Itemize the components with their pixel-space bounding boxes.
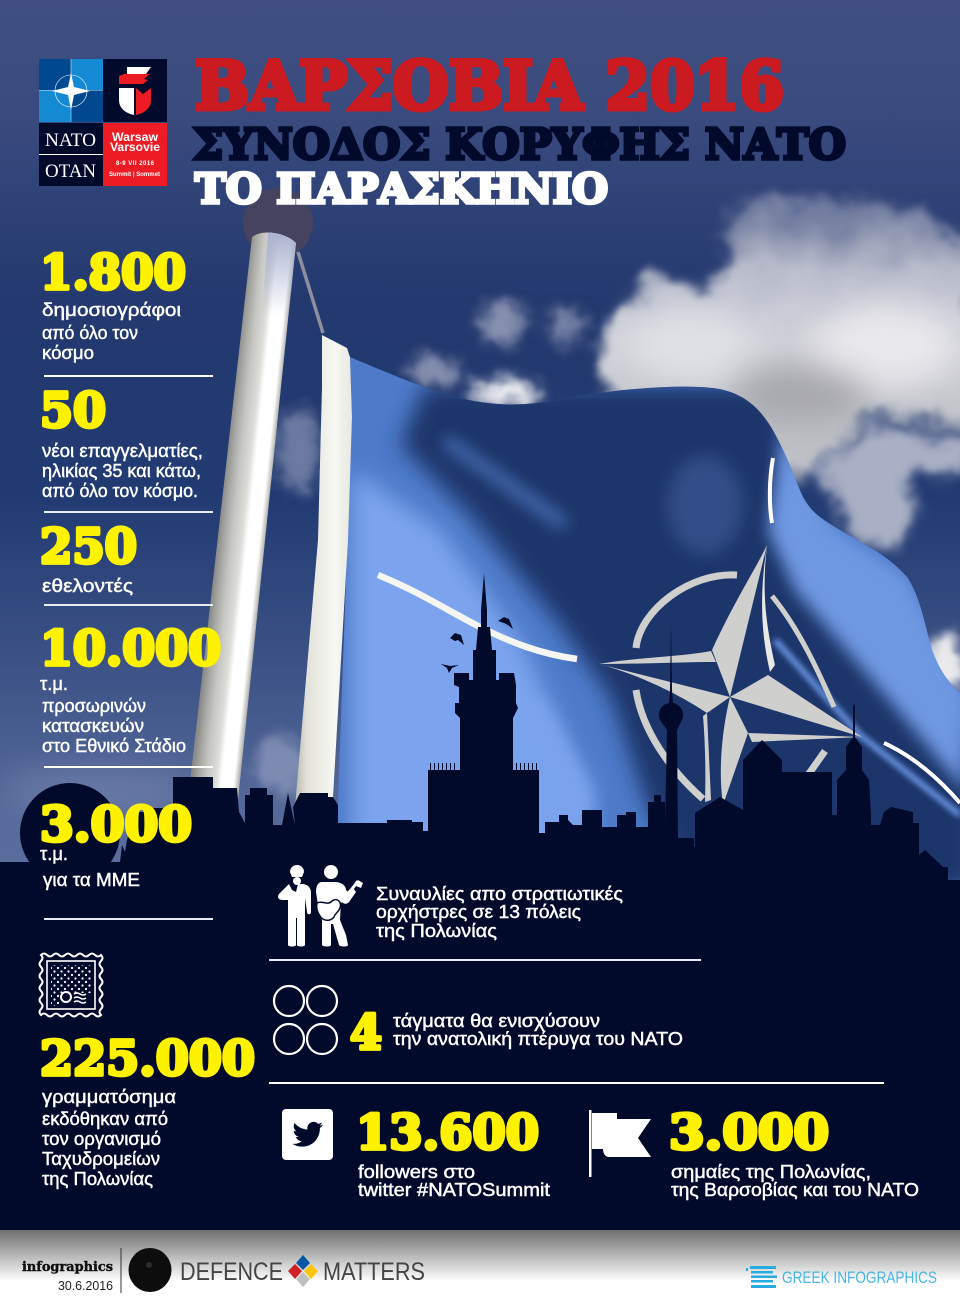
logo NATO OTAN: NATO	[45, 130, 96, 151]
stat: temporary structures: τ.μ.	[40, 674, 68, 694]
icon: musicians	[278, 865, 363, 946]
title block	[193, 47, 846, 213]
footer band	[0, 1230, 960, 1315]
clouds	[0, 197, 960, 816]
logo Warsaw text: Summit | Sommet	[109, 172, 160, 178]
stat: young professionals: από όλο τον κόσμο.	[42, 481, 198, 501]
pole shaft	[188, 232, 296, 800]
stat: journalists: από όλο τον	[42, 323, 138, 343]
summit logo	[39, 59, 167, 186]
footer: Defence Matters logo	[180, 1255, 425, 1287]
stat: four battalions: 4	[350, 1005, 382, 1061]
stat: media area: 3.000	[40, 797, 192, 853]
icon: flag	[589, 1110, 651, 1177]
logo compass	[39, 59, 103, 122]
flagpole	[188, 188, 323, 800]
logo Warsaw text: Varsovie	[110, 140, 160, 154]
title line 1: ΒΑΡΣΟΒΙΑ 2016	[195, 47, 784, 125]
stat: media area: τ.μ.	[40, 844, 68, 864]
stat: stamps: τον οργανισμό	[42, 1129, 161, 1149]
birds	[441, 617, 513, 673]
stat: stamps: της Πολωνίας	[42, 1169, 153, 1189]
flag cloth with folds	[320, 340, 960, 900]
footer: infographics credit: infographics	[22, 1260, 113, 1275]
stat: temporary structures: στο Εθνικό Στάδιο	[42, 736, 186, 756]
flag hoist band	[295, 335, 352, 807]
icon: twitter	[282, 1109, 333, 1160]
stat: temporary structures	[40, 621, 221, 756]
compass star	[599, 545, 862, 805]
stat: stamps: Ταχυδρομείων	[42, 1149, 160, 1169]
logo shield	[119, 67, 151, 115]
footer: Defence Matters logo: MATTERS	[323, 1258, 425, 1286]
stat: journalists: κόσμο	[42, 343, 94, 363]
stat: flags: της Βαρσοβίας και του ΝΑΤΟ	[671, 1180, 919, 1200]
text: concerts	[376, 884, 623, 941]
stat: young professionals: 50	[40, 383, 106, 439]
pole ball finial	[243, 188, 313, 258]
stat: media area: για τα ΜΜΕ	[43, 870, 140, 890]
stat: volunteers: 250	[40, 519, 137, 575]
stat: stamps: γραμματόσημα	[42, 1087, 176, 1107]
text: concerts: ορχήστρες σε 13 πόλεις	[376, 902, 581, 922]
stat: journalists	[40, 245, 186, 363]
stat: flags: 3.000	[669, 1105, 829, 1161]
stat: twitter followers	[356, 1105, 550, 1200]
footer: infographics credit: 30.6.2016	[58, 1278, 113, 1293]
stat: temporary structures: 10.000	[40, 621, 221, 677]
stat: young professionals: ηλικίας 35 και κάτω,	[42, 461, 201, 481]
stat: journalists: δημοσιογράφοι	[42, 300, 181, 320]
title line 3: ΤΟ ΠΑΡΑΣΚΗΝΙΟ	[195, 165, 608, 213]
flag white stripes	[378, 458, 960, 803]
icon: postage stamp	[40, 954, 102, 1016]
stat: twitter followers: twitter #NATOSummit	[358, 1180, 550, 1200]
compass ring arcs	[636, 575, 834, 799]
title line 2: ΣΥΝΟΔΟΣ ΚΟΡΥΦΗΣ ΝΑΤΟ	[193, 120, 846, 169]
stat: stamps: εκδόθηκαν από	[42, 1109, 168, 1129]
footer: black circle logo	[128, 1248, 172, 1292]
stat: four battalions	[350, 1005, 683, 1061]
sky background	[0, 0, 960, 900]
stat: young professionals: νέοι επαγγελματίες,	[42, 441, 203, 461]
logo NATO OTAN	[39, 130, 103, 182]
stat: stamps	[40, 1031, 255, 1189]
halyard rope	[298, 252, 323, 333]
stat: twitter followers: 13.600	[356, 1105, 539, 1161]
stat: stamps: 225.000	[40, 1031, 255, 1087]
stat: media area	[40, 797, 192, 890]
stat: temporary structures: προσωρινών	[42, 696, 146, 716]
footer: Defence Matters logo: DEFENCE	[180, 1258, 283, 1286]
stat: flags: σημαίες της Πολωνίας,	[671, 1162, 871, 1182]
icon: four battalions circles	[274, 986, 337, 1054]
city skyline silhouette	[0, 573, 960, 1230]
logo Warsaw text: Warsaw	[112, 130, 159, 144]
footer: Greek Infographics logo	[746, 1266, 937, 1288]
stat: flags	[669, 1105, 919, 1200]
logo NATO OTAN: OTAN	[45, 161, 96, 182]
stat: temporary structures: κατασκευών	[42, 716, 144, 736]
stat: journalists: 1.800	[40, 245, 186, 301]
logo Warsaw text: 8-9 VII 2016	[116, 161, 155, 167]
text: concerts: Συναυλίες απο στρατιωτικές	[376, 884, 623, 904]
stat: volunteers: εθελοντές	[42, 576, 133, 596]
stat: twitter followers: followers στο	[358, 1162, 475, 1182]
text: concerts: της Πολωνίας	[376, 921, 497, 941]
stat: young professionals	[40, 383, 203, 501]
footer: infographics credit	[22, 1248, 122, 1293]
stat: four battalions: τάγματα θα ενισχύσουν	[393, 1011, 600, 1031]
stat: four battalions: την ανατολική πτέρυγα του ΝΑΤΟ	[393, 1029, 683, 1049]
stats column	[40, 245, 255, 1189]
logo Warsaw text	[109, 130, 160, 178]
NATO flag	[295, 335, 960, 900]
